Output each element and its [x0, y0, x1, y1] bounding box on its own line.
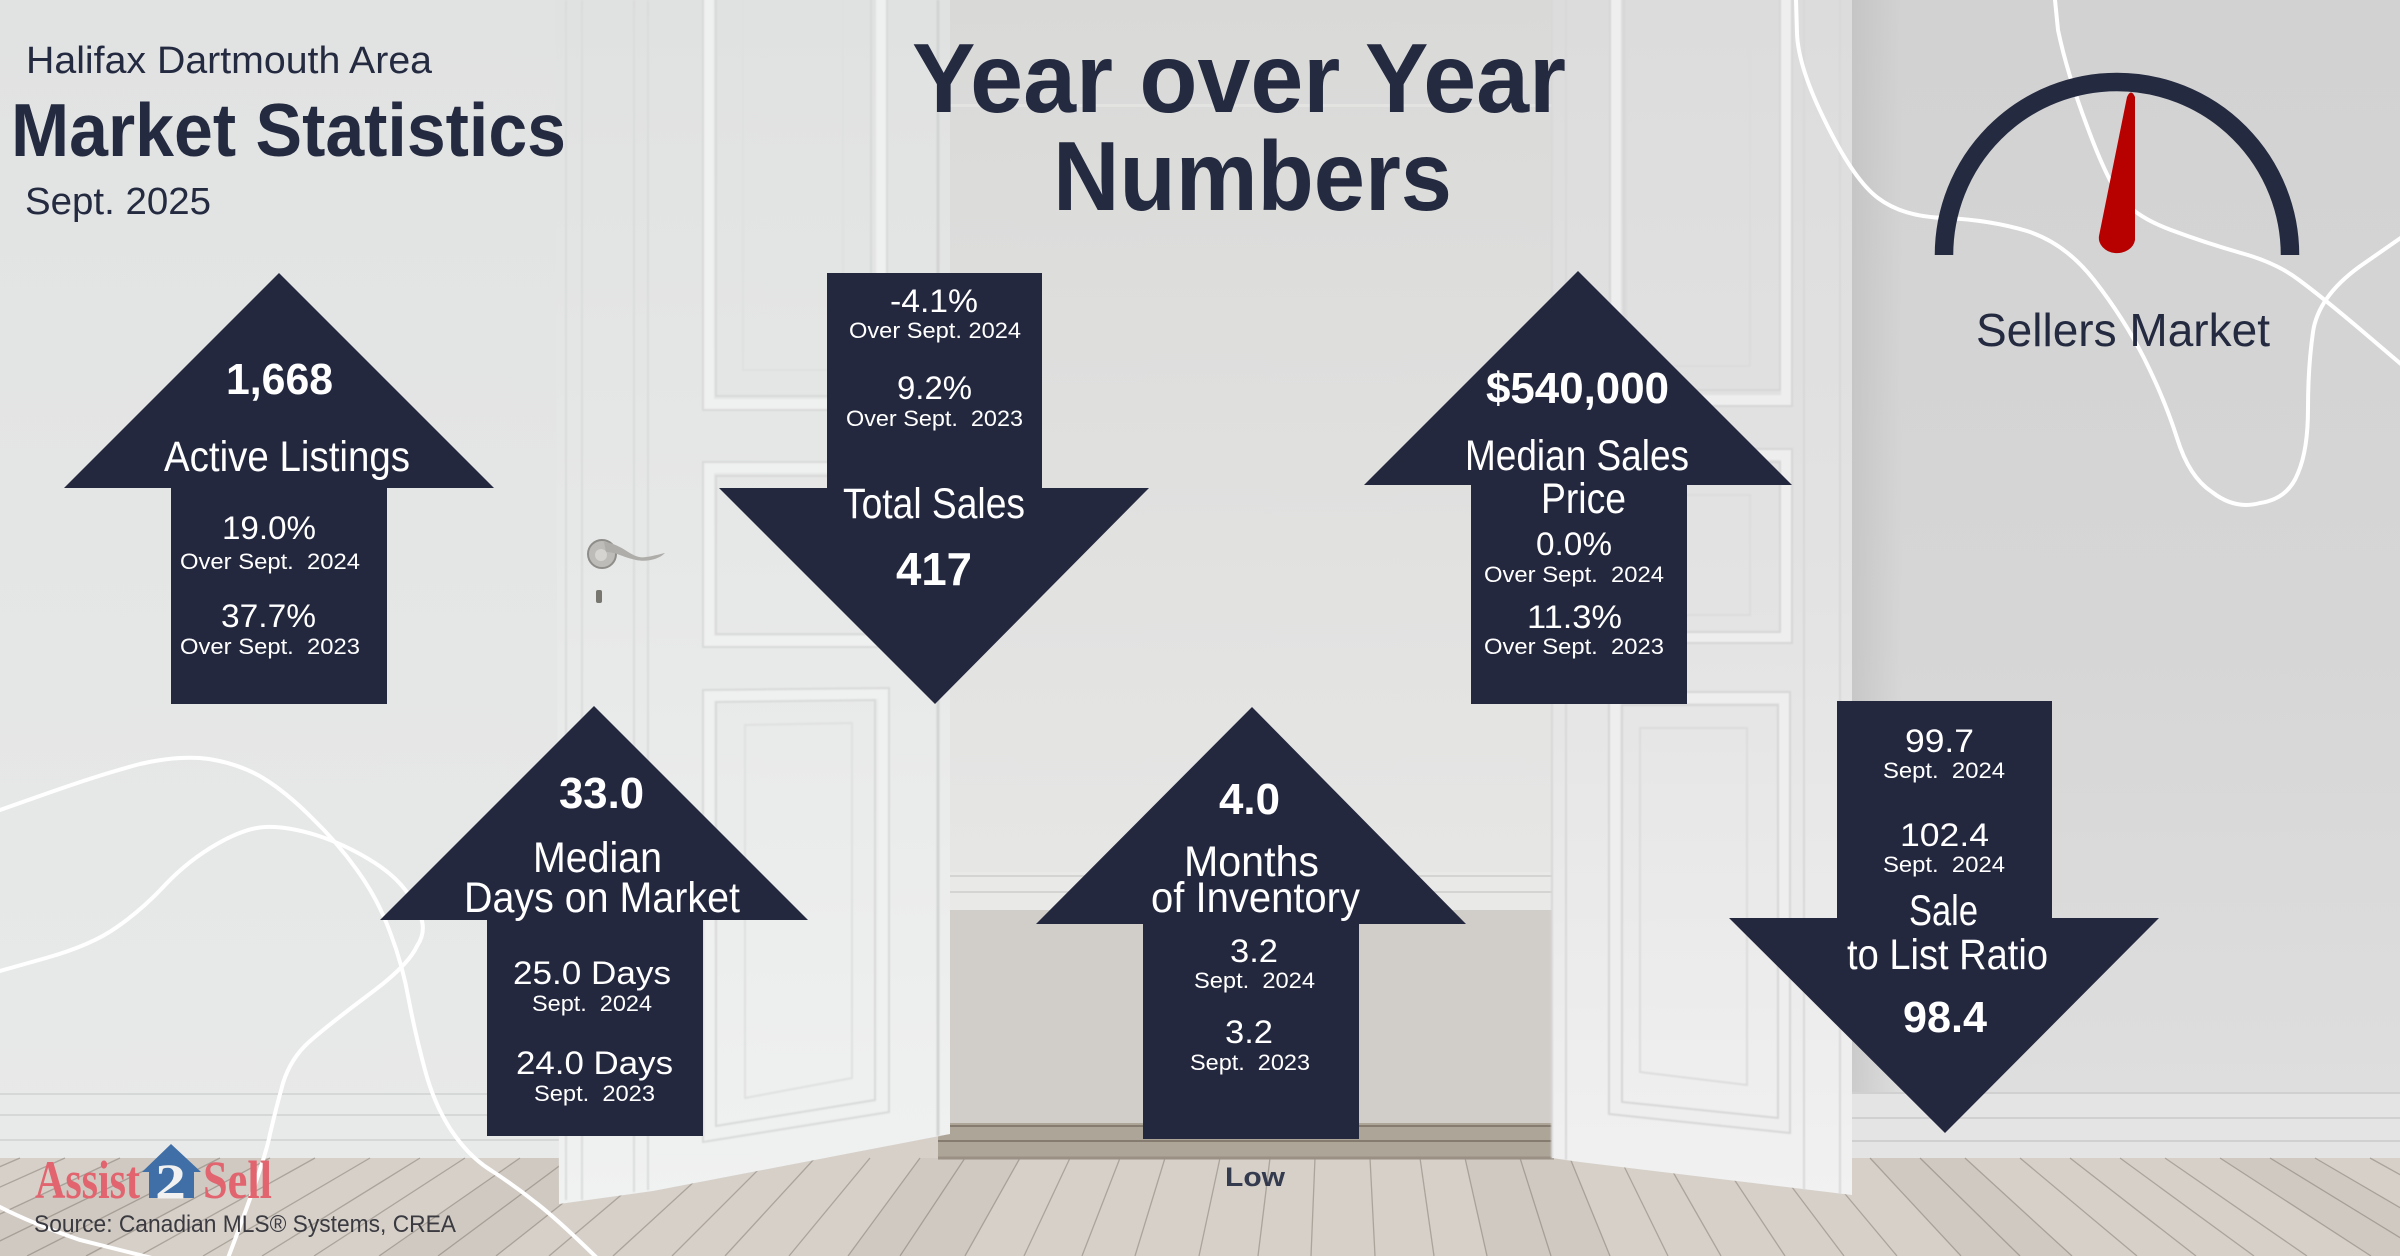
arrow up: active listings: Over Sept. 2024: [180, 549, 360, 574]
arrow up: active listings: [64, 273, 494, 704]
source note: Source: Canadian MLS® Systems, CREA: [34, 1211, 456, 1238]
change over 2023: 9.2%: [897, 370, 972, 406]
title: year over year numbers: Numbers: [1053, 121, 1452, 231]
gauge needle: [2099, 92, 2135, 253]
arrow down: sale to list ratio: [1729, 701, 2159, 1133]
date: Sept. 2025: [25, 181, 211, 223]
logo: Assist 2 Sell: 2: [155, 1153, 186, 1209]
label: Active Listings: [164, 433, 410, 481]
value: 417: [896, 543, 972, 595]
Sept 2024 value: 3.2: [1230, 933, 1278, 969]
main title: Market Statistics: [11, 88, 566, 172]
gauge arc: [1944, 82, 2290, 255]
value: 98.4: [1903, 993, 1988, 1042]
value: $540,000: [1486, 364, 1669, 413]
arrow up: months of inventory: Sept. 2023: [1190, 1050, 1310, 1075]
arrow up: months of inventory: of Inventory: [1151, 874, 1360, 922]
second comparison value: 102.4: [1900, 817, 1989, 853]
label: Sale: [1909, 887, 1978, 935]
arrow up: months of inventory: Sept. 2024: [1194, 968, 1315, 993]
label: Median: [533, 834, 662, 882]
arrow up: median days on market: [380, 706, 808, 1136]
change over 2024: -4.1%: [890, 283, 978, 319]
icon: door handle: [588, 540, 665, 603]
low indicator text: Low: [1225, 1162, 1286, 1192]
arrow up: median days on market: Sept. 2024: [532, 991, 652, 1016]
change over 2023: 37.7%: [221, 598, 316, 634]
arrow down: total sales: Over Sept. 2023: [846, 406, 1023, 431]
label: Total Sales: [843, 480, 1025, 528]
heading: area and market statistics: [11, 40, 566, 223]
label: Median Sales: [1465, 432, 1689, 480]
value: 33.0: [559, 769, 644, 818]
change over 2024: 19.0%: [222, 510, 316, 546]
logo house: [142, 1144, 201, 1198]
logo wordmark right: Sell: [203, 1150, 272, 1210]
arrow down: sale to list ratio: to List Ratio: [1847, 931, 2048, 979]
change over 2024: 0.0%: [1536, 526, 1612, 562]
arrow down: total sales: [719, 273, 1149, 704]
arrow up: median sales price: Over Sept. 2023: [1484, 634, 1664, 659]
arrow up: months of inventory: [1036, 707, 1466, 1139]
arrow up: median sales price: Price: [1541, 475, 1626, 523]
change over 2023: 11.3%: [1527, 599, 1622, 635]
logo: Assist 2 Sell: [35, 1144, 272, 1210]
Sept 2023 value: 3.2: [1225, 1014, 1273, 1050]
title: year over year numbers: Year over Year: [912, 23, 1566, 133]
title: year over year numbers: [912, 23, 1566, 231]
arrow down: total sales: Over Sept. 2024: [849, 318, 1021, 343]
gauge label: Sellers Market: [1976, 304, 2270, 356]
arrow up: median days on market: Sept. 2023: [534, 1081, 655, 1106]
area name: Halifax Dartmouth Area: [26, 40, 433, 82]
arrow up: active listings: Over Sept. 2023: [180, 634, 360, 659]
arrow up: median sales price: Over Sept. 2024: [1484, 562, 1664, 587]
Sept 2024 value: 99.7: [1905, 723, 1974, 759]
label: Months: [1184, 838, 1319, 886]
arrow down: sale to list ratio: Sept. 2024: [1883, 758, 2005, 783]
logo wordmark left: Assist: [35, 1150, 140, 1210]
gauge: sellers market: [1944, 82, 2290, 356]
arrow down: sale to list ratio: Sept. 2024: [1883, 852, 2005, 877]
Sept 2023 value: 24.0 Days: [516, 1045, 673, 1081]
Sept 2024 value: 25.0 Days: [513, 955, 671, 991]
arrow up: median sales price: [1364, 271, 1792, 704]
arrow up: median days on market: Days on Market: [464, 874, 740, 922]
value: 4.0: [1219, 775, 1280, 824]
value: 1,668: [226, 355, 333, 404]
